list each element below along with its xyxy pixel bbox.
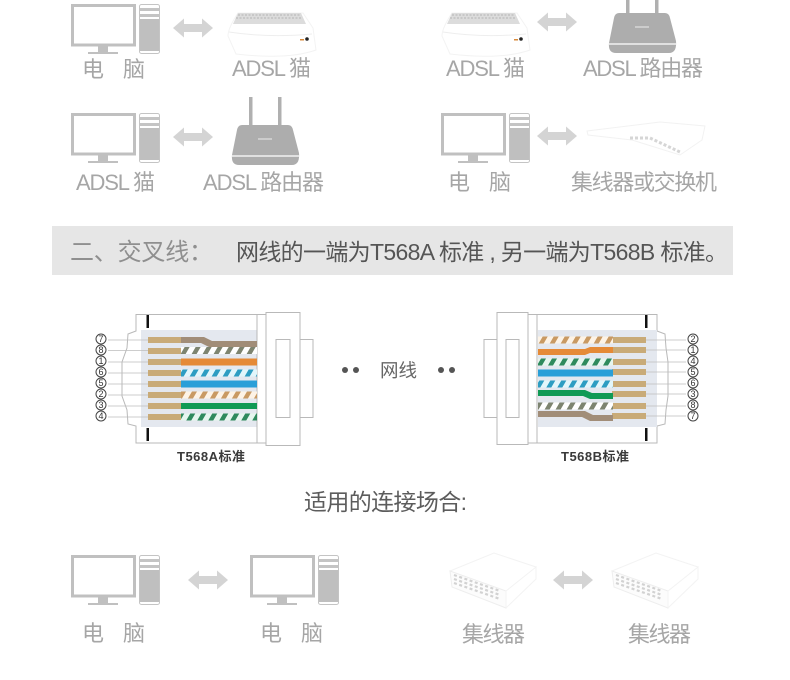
pin numbers: 4 xyxy=(690,356,696,366)
wires xyxy=(181,337,257,420)
pin numbers: 2 xyxy=(98,389,104,399)
pin numbers: 3 xyxy=(690,389,696,399)
pairing: computer to hub or switch: 集线器或交换机 xyxy=(571,170,717,195)
connector body xyxy=(122,312,313,446)
gold contacts xyxy=(612,337,646,419)
pairing: hub to hub: 集线器 xyxy=(462,622,525,647)
connector body xyxy=(484,312,668,444)
pin numbers: 7 xyxy=(98,334,104,344)
cable label with dots: 网线 xyxy=(380,360,417,381)
connector: T568A xyxy=(96,312,313,464)
cable label with dots xyxy=(342,360,455,381)
pairing: computer to ADSL modem xyxy=(72,4,316,82)
pin numbers: 3 xyxy=(98,400,104,410)
section heading band: 网线的一端为T568A 标准 , 另一端为T568B 标准。 xyxy=(236,239,728,265)
pairing: ADSL modem to ADSL router: ADSL 猫 xyxy=(446,56,525,81)
pairing: hub to hub xyxy=(450,553,698,647)
pin numbers xyxy=(96,334,148,421)
pin numbers: 5 xyxy=(690,367,696,377)
caption: T568B标准 xyxy=(561,449,629,464)
pairing: ADSL modem to ADSL router: ADSL 路由器 xyxy=(583,56,703,81)
pairing: computer to computer: 电 脑 xyxy=(82,621,145,646)
pairing: computer to hub or switch xyxy=(442,114,717,195)
pairing: hub to hub: 集线器 xyxy=(628,622,691,647)
pin numbers: 2 xyxy=(690,334,696,344)
pin numbers: 7 xyxy=(690,411,696,421)
applicable connection scenarios heading: 适用的连接场合: xyxy=(304,489,467,515)
pin numbers: 4 xyxy=(98,411,104,421)
pairing: computer to hub or switch: 电 脑 xyxy=(448,170,511,195)
pairing: computer to ADSL modem: ADSL 猫 xyxy=(232,56,311,81)
section heading band xyxy=(52,226,733,275)
pin numbers: 8 xyxy=(98,345,104,355)
pairing: computer to ADSL router: ADSL 猫 xyxy=(76,170,155,195)
pin numbers: 6 xyxy=(690,378,696,388)
pin numbers xyxy=(646,334,698,421)
pairing: ADSL modem to ADSL router xyxy=(442,0,703,81)
pin numbers: 8 xyxy=(690,400,696,410)
wires xyxy=(538,336,613,421)
pin numbers: 1 xyxy=(98,356,104,366)
pairing: computer to computer: 电 脑 xyxy=(260,621,323,646)
pairing: computer to computer xyxy=(72,556,338,646)
pin numbers: 5 xyxy=(98,378,104,388)
connector: T568B xyxy=(484,312,698,464)
pairing: computer to ADSL router: ADSL 路由器 xyxy=(203,170,324,195)
pin numbers: 1 xyxy=(690,345,696,355)
pin numbers: 6 xyxy=(98,367,104,377)
pairing: computer to ADSL modem: 电 脑 xyxy=(82,57,145,82)
caption: T568A标准 xyxy=(177,449,245,464)
gold contacts xyxy=(148,337,182,420)
section heading band: 二、交叉线： xyxy=(70,239,213,266)
pairing: computer to ADSL router xyxy=(72,97,324,195)
